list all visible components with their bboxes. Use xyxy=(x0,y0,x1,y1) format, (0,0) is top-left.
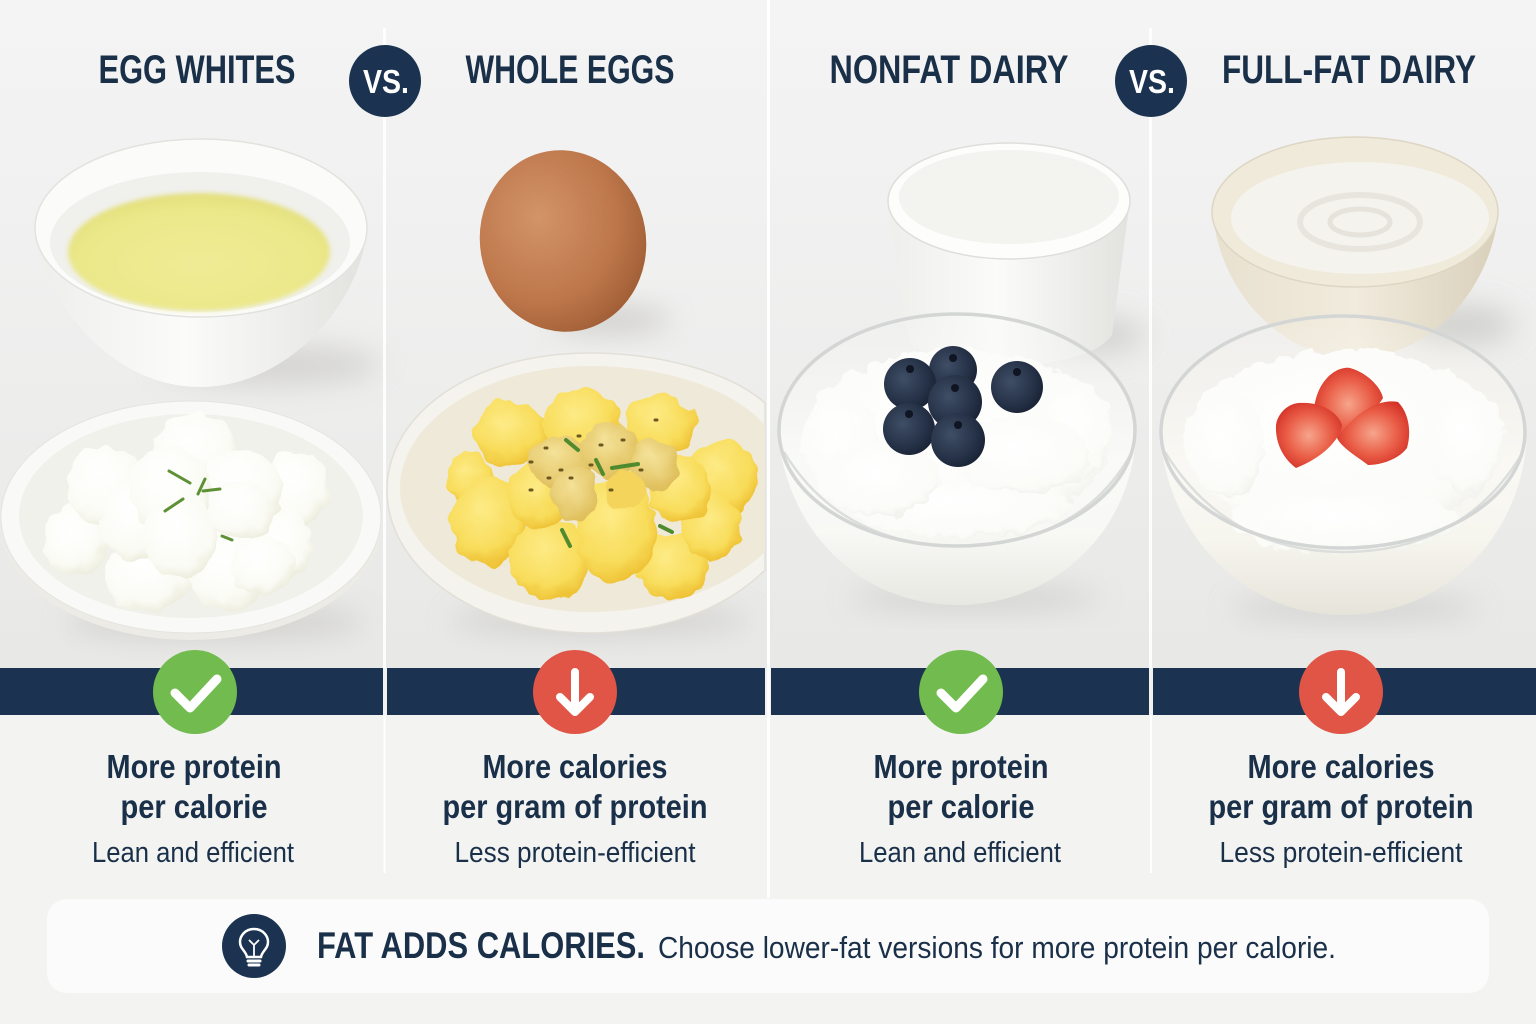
heading: nonfat dairy: NONFAT DAIRY xyxy=(830,48,1069,92)
callout text: Choose lower-fat versions for more protein per calorie. xyxy=(658,930,1336,965)
panel: nonfat dairy xyxy=(778,48,1145,610)
panel: whole eggs xyxy=(387,48,765,634)
panel: full-fat dairy xyxy=(1160,48,1527,620)
image: glass bowl of cottage cheese with blueberries xyxy=(778,314,1136,610)
badge: vs. right: VS. xyxy=(1129,63,1175,100)
icon: lightbulb xyxy=(222,914,286,978)
text block: nonfat dairy result xyxy=(859,748,1061,869)
image: plate of scrambled whole eggs xyxy=(387,353,765,634)
callout text: FAT ADDS CALORIES. xyxy=(317,925,645,966)
text block: whole eggs result: More calories xyxy=(482,748,668,785)
image: bowl of liquid egg whites xyxy=(35,139,380,387)
panel: egg whites xyxy=(0,48,382,640)
text block: nonfat dairy result: Lean and efficient xyxy=(859,837,1061,869)
text block: whole eggs result: Less protein-efficient xyxy=(454,837,696,869)
text block: full-fat dairy result: Less protein-efficient xyxy=(1220,837,1462,869)
heading: full-fat dairy: FULL-FAT DAIRY xyxy=(1222,48,1476,92)
icon: red down arrow 1 xyxy=(533,650,617,734)
text block: egg whites result: Lean and efficient xyxy=(92,837,294,869)
text block: full-fat dairy result: per gram of protein xyxy=(1208,788,1474,825)
icon: red down arrow 2 xyxy=(1299,650,1383,734)
result bands xyxy=(0,668,1536,715)
badge: vs. right xyxy=(1115,45,1187,117)
heading: whole eggs: WHOLE EGGS xyxy=(466,48,674,92)
image: bowl of full-fat yogurt xyxy=(1212,137,1515,358)
text block: full-fat dairy result xyxy=(1208,748,1474,869)
badge: vs. left xyxy=(349,45,421,117)
icon: green check 2 xyxy=(919,650,1003,734)
text block: egg whites result xyxy=(92,748,294,869)
image: brown egg xyxy=(465,137,670,345)
icon: green check 1 xyxy=(153,650,237,734)
icon: blueberries xyxy=(883,346,1043,467)
vertical dividers xyxy=(383,0,1152,898)
badge: vs. left: VS. xyxy=(363,63,409,100)
heading: egg whites: EGG WHITES xyxy=(98,48,296,92)
lower background xyxy=(0,715,1536,1024)
text block: whole eggs result: per gram of protein xyxy=(442,788,708,825)
text block: whole eggs result xyxy=(442,748,708,869)
image: cup of nonfat yogurt xyxy=(888,143,1145,366)
icon: strawberries xyxy=(1276,368,1409,468)
text block: nonfat dairy result: More protein xyxy=(874,748,1048,785)
text block: egg whites result: More protein xyxy=(106,748,282,785)
text block: full-fat dairy result: More calories xyxy=(1248,748,1434,785)
image: plate of scrambled egg whites xyxy=(0,401,382,640)
text block: nonfat dairy result: per calorie xyxy=(888,788,1034,825)
page background xyxy=(0,0,1536,668)
image: glass bowl of cottage cheese with strawberries xyxy=(1160,316,1527,620)
callout text xyxy=(317,925,1336,966)
callout: takeaway xyxy=(47,899,1489,993)
text block: egg whites result: per calorie xyxy=(120,788,268,825)
